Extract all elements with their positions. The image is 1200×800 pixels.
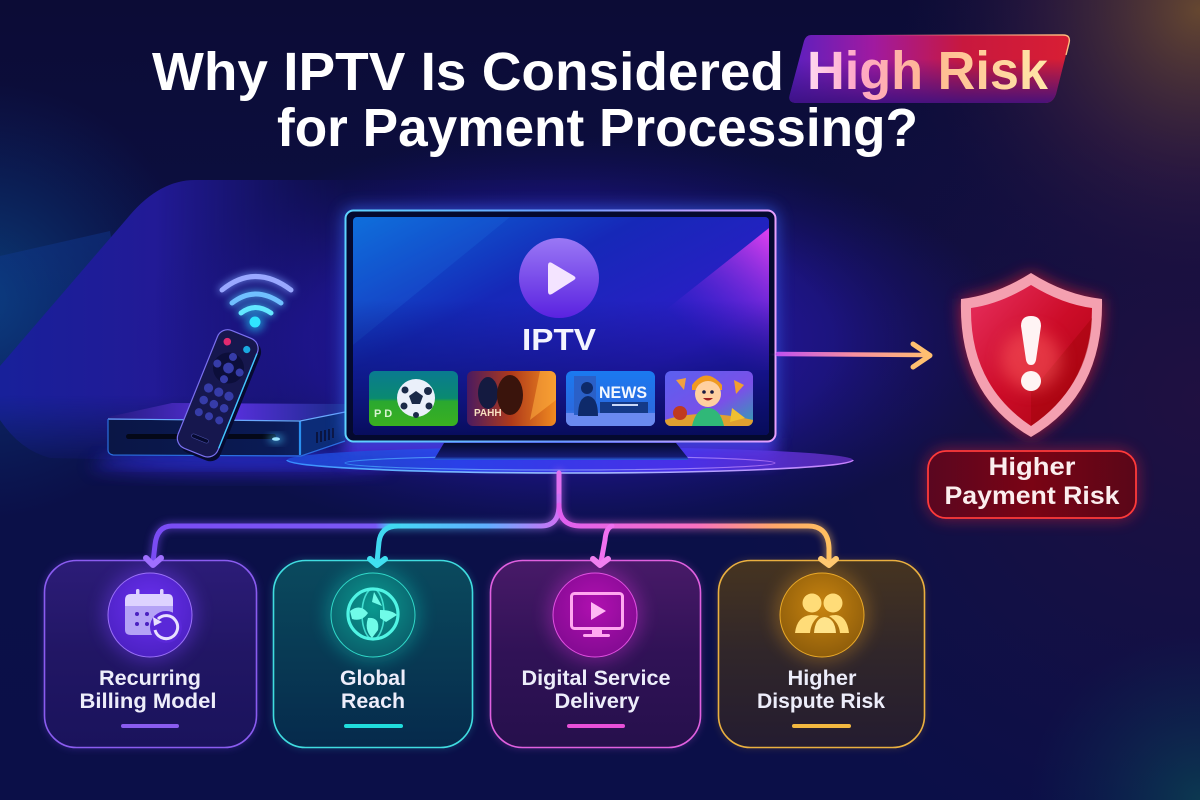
icon: exclamation mark	[1001, 316, 1061, 391]
trunk line	[556, 473, 562, 498]
card: digital service delivery: Digital Service	[522, 667, 670, 690]
title line 1: Why IPTV Is Considered	[152, 42, 784, 102]
arrow to shield	[778, 344, 930, 367]
icon: wifi signal	[222, 276, 291, 332]
icon: calendar refresh	[102, 567, 198, 663]
branch to recurring billing	[146, 496, 559, 565]
card: recurring billing model: Recurring	[99, 667, 201, 690]
tv screen	[353, 217, 769, 435]
branch to digital service	[593, 526, 612, 565]
thumbnail: sports	[369, 371, 458, 426]
platform glow	[287, 438, 853, 473]
card: digital service delivery	[490, 560, 701, 748]
thumbnail: movie	[467, 371, 556, 426]
card: global reach	[273, 560, 473, 748]
thumbnail: movie: PAHH	[474, 408, 502, 419]
branch to higher dispute	[559, 505, 836, 565]
title line 2: for Payment Processing?	[277, 98, 918, 158]
card: recurring billing model: Billing Model	[80, 690, 216, 713]
tv stand	[434, 443, 688, 460]
card: recurring billing model	[44, 560, 257, 748]
television	[343, 208, 777, 460]
label: higher payment risk: Payment Risk	[944, 482, 1120, 510]
icon: people group	[774, 567, 870, 663]
card: higher dispute risk	[718, 560, 925, 748]
warning shield	[961, 273, 1102, 437]
icon: globe	[325, 567, 421, 663]
title	[152, 35, 1069, 158]
remote control	[173, 326, 265, 465]
icon: monitor play	[547, 567, 643, 663]
card: higher dispute risk: Dispute Risk	[757, 690, 885, 713]
thumbnail: news: NEWS	[599, 383, 647, 402]
set-top box	[100, 403, 360, 465]
label: higher payment risk: Higher	[988, 453, 1076, 481]
card: global reach: Reach	[341, 690, 405, 713]
highlight badge: High Risk	[807, 41, 1049, 101]
thumbnail: sports: P D	[374, 408, 392, 420]
thumbnail: news	[566, 371, 655, 426]
card: higher dispute risk: Higher	[788, 667, 856, 690]
thumbnail: kids cartoon	[665, 371, 753, 426]
card: global reach: Global	[340, 667, 406, 690]
play button icon	[519, 238, 599, 318]
card: digital service delivery: Delivery	[554, 690, 640, 713]
tv label: IPTV	[522, 322, 596, 357]
branch to global reach	[370, 526, 398, 565]
label: higher payment risk	[927, 450, 1137, 519]
connector lines	[146, 473, 836, 565]
